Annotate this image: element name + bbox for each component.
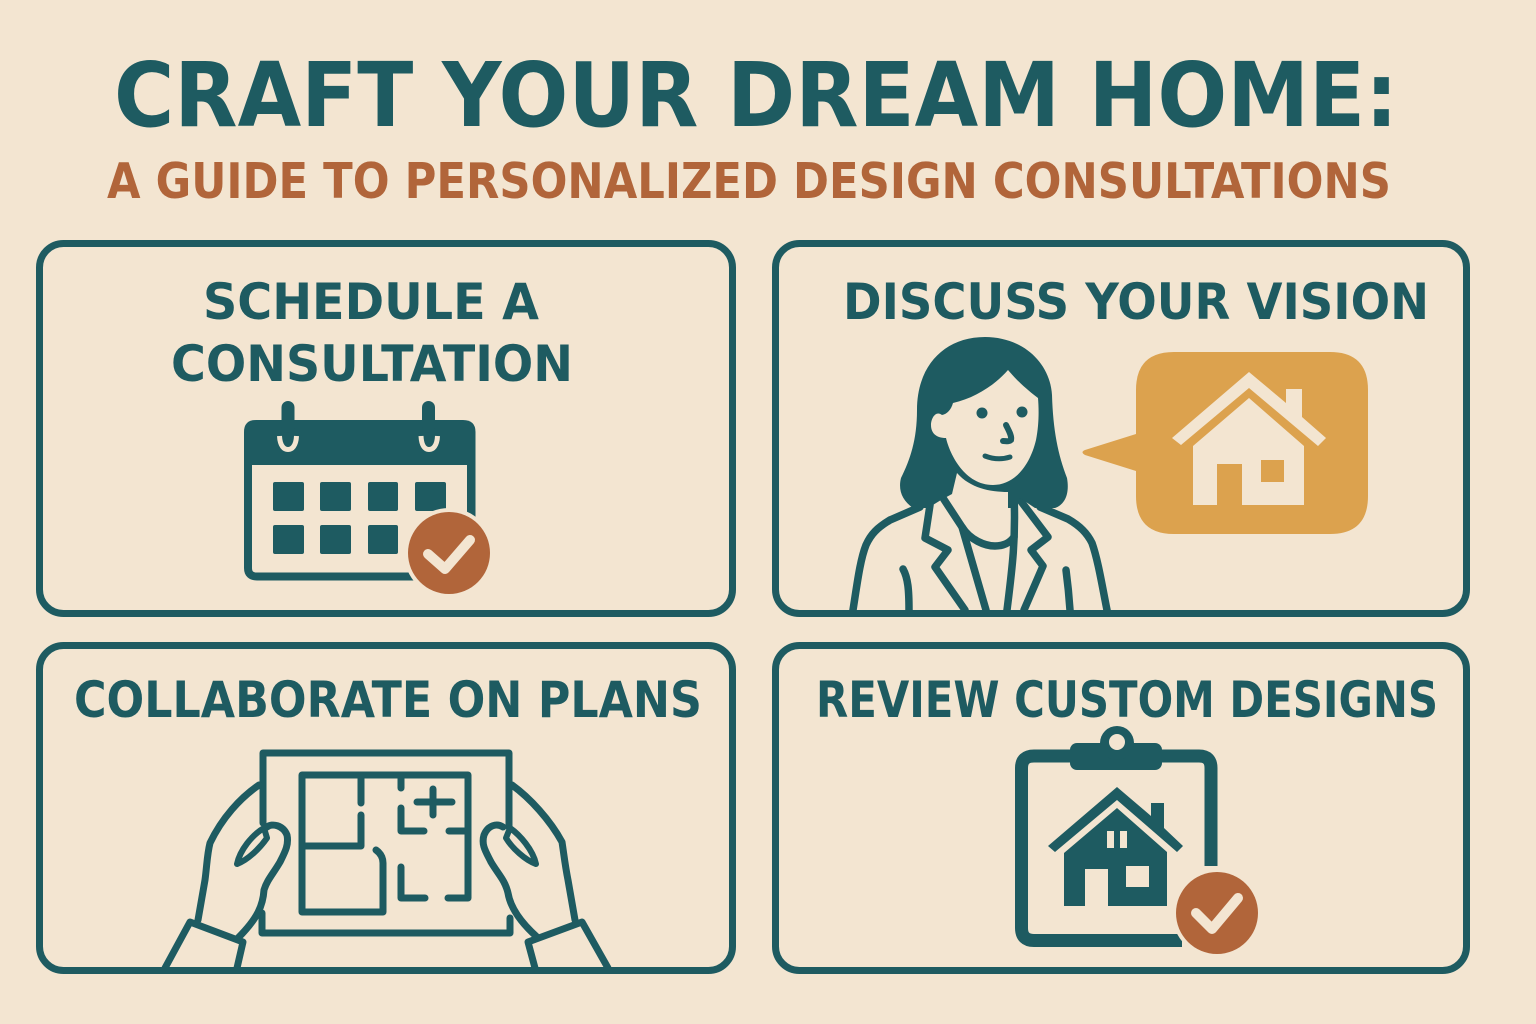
heading: schedule a consultation: CONSULTATION (171, 335, 573, 393)
heading: collaborate on plans: COLLABORATE ON PLANS (74, 671, 702, 729)
panel: review custom designs (776, 646, 1466, 970)
panel: discuss your vision (776, 244, 1466, 614)
icon: hands holding floor plan (165, 753, 608, 968)
heading: discuss your vision: DISCUSS YOUR VISION (843, 273, 1429, 331)
icon: clipboard with house and check (1022, 726, 1262, 958)
heading: schedule a consultation (171, 273, 573, 393)
subtitle: A GUIDE TO PERSONALIZED DESIGN CONSULTATIONS (107, 153, 1391, 210)
icon: speech bubble with house (1082, 352, 1368, 534)
title: CRAFT YOUR DREAM HOME: (114, 43, 1398, 147)
icon: calendar with check (244, 401, 494, 598)
panel: collaborate on plans (40, 646, 732, 970)
heading: schedule a consultation: SCHEDULE A (203, 273, 539, 331)
icon: consultant woman (853, 337, 1107, 610)
panel: schedule a consultation (40, 244, 732, 614)
